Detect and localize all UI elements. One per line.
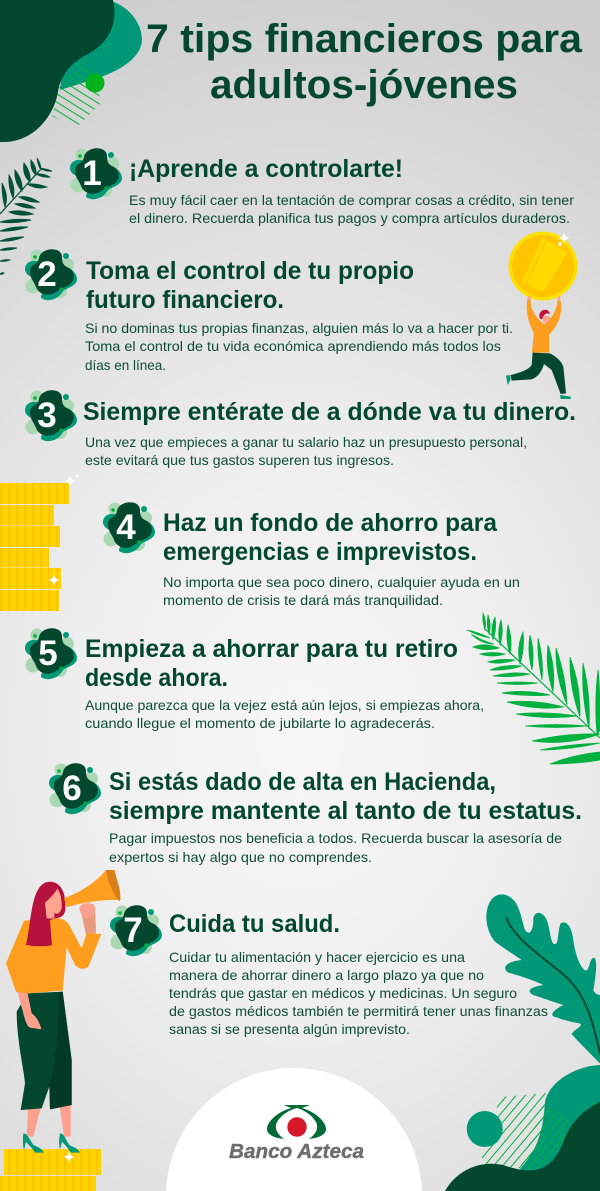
badge 1: 1 (82, 154, 102, 193)
decorative hills bottom right (445, 1065, 600, 1191)
body 2 (85, 320, 513, 373)
badge 1 (70, 148, 122, 199)
heading 5: desde ahora. (85, 664, 228, 692)
badge 4: 4 (116, 508, 136, 547)
body 2: días en línea. (85, 357, 166, 373)
icon: gold coin (508, 232, 578, 300)
badge 5: 5 (38, 634, 58, 673)
tip 1 (70, 148, 574, 226)
body 7: de gastos médicos también te permitirá tener unas finanzas (169, 1003, 548, 1019)
heading 2: futuro financiero. (86, 286, 284, 314)
illustration: running man (506, 295, 571, 399)
icon: coin stack left (0, 474, 78, 611)
body 7: Cuidar tu alimentación y hacer ejercicio es una (169, 949, 465, 965)
body 7: tendrás que gastar en médicos y medicinas. Un seguro (169, 985, 517, 1001)
body 1: Es muy fácil caer en la tentación de comprar cosas a crédito, sin tener (129, 192, 574, 208)
body 7 (169, 949, 548, 1037)
body 2: Toma el control de tu vida económica aprendiendo más todos los (85, 338, 501, 354)
body 4 (163, 574, 520, 608)
title: adultos-jóvenes (210, 63, 518, 107)
top-left decorative blobs (0, 0, 142, 142)
tip 6 (49, 763, 582, 865)
body 1: el dinero. Recuerda planifica tus pagos y compra artículos duraderos. (129, 210, 570, 226)
logo: Banco Azteca (229, 1105, 364, 1163)
tip 2 (25, 249, 513, 373)
body 3: este evitará que tus gastos superen tus ingresos. (85, 452, 394, 468)
body 5 (85, 697, 484, 731)
icon: dark palm leaf (0, 158, 52, 274)
illustration: woman with megaphone (6, 870, 121, 1153)
badge 7 (110, 905, 162, 956)
heading 2 (86, 257, 414, 314)
body 2: Si no dominas tus propias finanzas, alguien más lo va a hacer por ti. (85, 320, 513, 336)
body 7: sanas si se presenta algún imprevisto. (169, 1021, 410, 1037)
heading 4: Haz un fondo de ahorro para (163, 509, 498, 537)
coin stack under woman (0, 1149, 101, 1191)
heading 6: Si estás dado de alta en Hacienda, (109, 768, 496, 796)
body 5: Aunque parezca que la vejez está aún lejos, si empiezas ahora, (85, 697, 484, 713)
title: 7 tips financieros para (146, 17, 583, 61)
body 1 (129, 192, 574, 226)
heading 4 (163, 509, 498, 566)
badge 2: 2 (37, 255, 57, 294)
icon: monstera leaf (486, 894, 600, 1063)
heading 2: Toma el control de tu propio (86, 257, 414, 285)
body 3 (85, 434, 527, 468)
badge 3: 3 (37, 396, 57, 435)
body 3: Una vez que empieces a ganar tu salario haz un presupuesto personal, (85, 434, 527, 450)
heading 5: Empieza a ahorrar para tu retiro (85, 635, 458, 663)
title (146, 17, 583, 107)
badge 7: 7 (123, 911, 143, 950)
body 4: No importa que sea poco dinero, cualquier ayuda en un (163, 574, 520, 590)
heading 3: Siempre entérate de a dónde va tu dinero. (83, 398, 576, 426)
heading 5 (85, 635, 458, 692)
body 5: cuando llegue el momento de jubilarte lo agradecerás. (85, 715, 435, 731)
badge 3 (25, 390, 77, 441)
heading 1: ¡Aprende a controlarte! (129, 155, 403, 183)
body 7: manera de ahorrar dinero a largo plazo ya que no (169, 967, 484, 983)
body 6: expertos si hay algo que no comprendes. (109, 849, 372, 865)
icon: green palm leaf (467, 613, 600, 764)
tip 7 (110, 905, 548, 1037)
badge 5 (25, 628, 77, 679)
tip 3 (25, 390, 576, 468)
heading 6: siempre mantente al tanto de tu estatus. (109, 797, 582, 825)
body 6 (109, 830, 562, 865)
heading 6 (109, 768, 582, 825)
badge 6: 6 (62, 769, 82, 808)
heading 7: Cuida tu salud. (169, 910, 340, 938)
body 4: momento de crisis te dará más tranquilidad. (163, 592, 443, 608)
logo: Banco Azteca: Banco Azteca (229, 1141, 364, 1163)
badge 2 (25, 249, 77, 300)
tip 4 (103, 502, 520, 608)
badge 4 (103, 502, 155, 553)
tip 5 (25, 628, 484, 731)
white logo circle (166, 1068, 422, 1191)
body 6: Pagar impuestos nos beneficia a todos. Recuerda buscar la asesoría de (109, 830, 562, 846)
badge 6 (49, 763, 101, 814)
heading 4: emergencias e imprevistos. (163, 538, 477, 566)
